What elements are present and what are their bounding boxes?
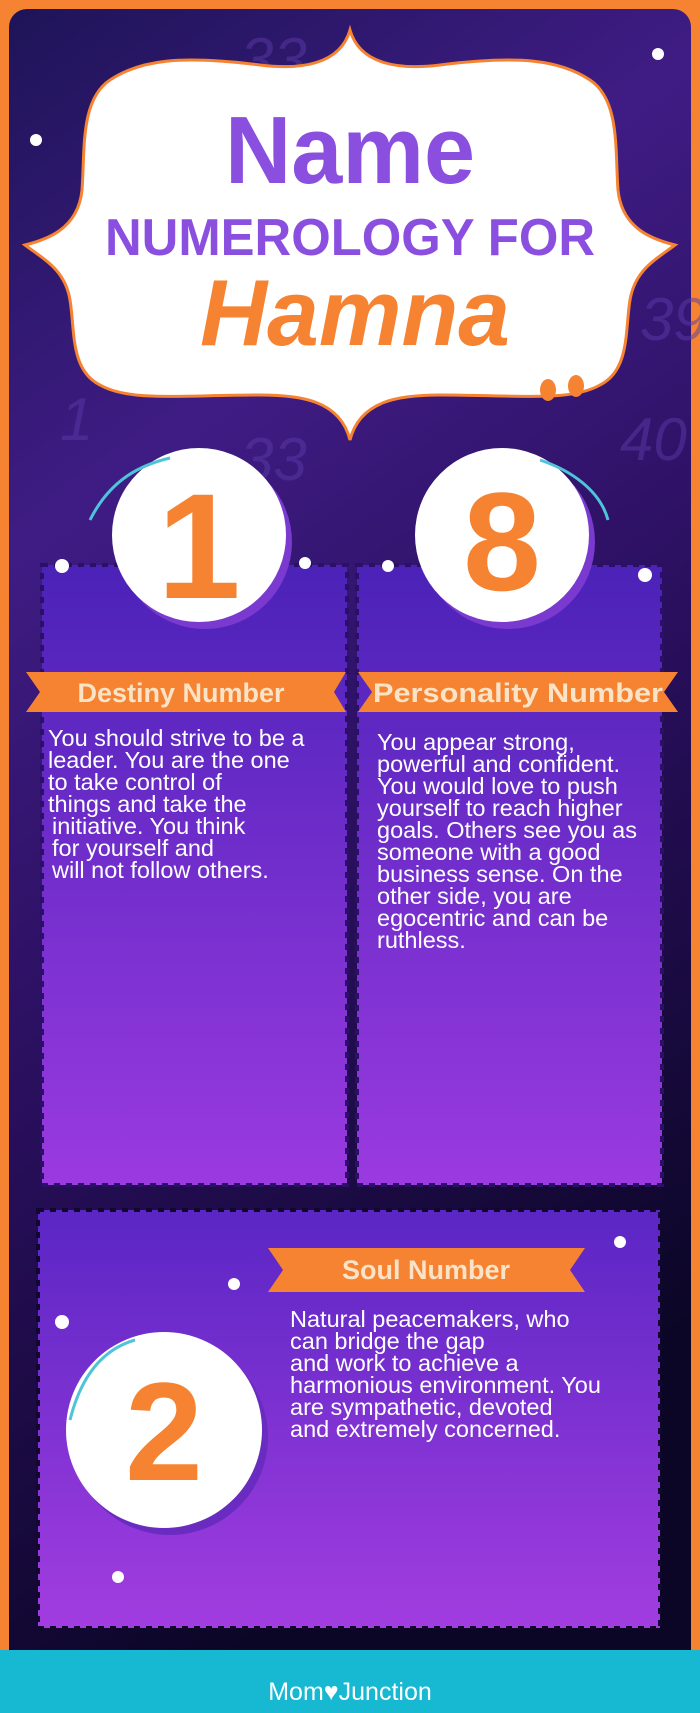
text: personality: other side, you are [377, 883, 572, 909]
circle: 8 [415, 448, 608, 629]
decorative numbers [60, 26, 700, 493]
circle: 2: 2 [125, 1353, 203, 1510]
text: personality: goals. Others see you as [377, 817, 637, 843]
heading: Name: Name [225, 97, 475, 204]
footer [0, 1650, 700, 1713]
decorative numbers: 40 [620, 406, 687, 473]
text: destiny: for yourself and [52, 835, 214, 861]
ribbon: Destiny Number: Destiny Number [77, 678, 285, 708]
text: personality: powerful and confident. [377, 751, 620, 777]
text: soul [290, 1306, 601, 1442]
ribbon: Personality Number: Personality Number [373, 678, 664, 708]
text: destiny: You should strive to be a [48, 725, 305, 751]
text: soul: and work to achieve a [290, 1350, 520, 1376]
panel: personality [357, 565, 662, 1185]
ribbon: Soul Number: Soul Number [342, 1255, 510, 1285]
heading: Hamna: Hamna [200, 260, 510, 365]
text: personality: business sense. On the [377, 861, 623, 887]
ribbon: Destiny Number [26, 672, 346, 712]
heading: NUMEROLOGY FOR: NUMEROLOGY FOR [105, 209, 595, 267]
circle: 2 [66, 1332, 268, 1535]
text: personality: You would love to push [377, 773, 618, 799]
decorative numbers: 33 [240, 26, 307, 93]
decorative numbers: 33 [240, 426, 307, 493]
panel: soul [38, 1210, 660, 1628]
panel: destiny [42, 565, 347, 1185]
text: personality: yourself to reach higher [377, 795, 623, 821]
text: destiny: initiative. You think [52, 813, 246, 839]
text: destiny: to take control of [48, 769, 222, 795]
text: destiny [48, 725, 305, 883]
text: soul: harmonious environment. You [290, 1372, 601, 1398]
text: destiny: leader. You are the one [48, 747, 290, 773]
footer: Mom♥Junction [268, 1678, 432, 1706]
text: soul: are sympathetic, devoted [290, 1394, 553, 1420]
ribbon: Personality Number [358, 672, 678, 712]
text: personality: someone with a good [377, 839, 600, 865]
text: soul: and extremely concerned. [290, 1416, 560, 1442]
title cartouche [25, 30, 675, 440]
text: personality [377, 729, 637, 953]
circle: 1: 1 [157, 462, 241, 630]
text: destiny: things and take the [48, 791, 247, 817]
text: soul: can bridge the gap [290, 1328, 485, 1354]
circle: 8: 8 [463, 463, 541, 620]
circle: 1 [90, 448, 292, 630]
icon: feet [540, 375, 584, 401]
text: destiny: will not follow others. [51, 857, 269, 883]
text: personality: You appear strong, [377, 729, 575, 755]
ribbon: Soul Number [268, 1248, 585, 1292]
decorative numbers: 1 [60, 386, 93, 453]
text: personality: ruthless. [377, 927, 466, 953]
text: soul: Natural peacemakers, who [290, 1306, 570, 1332]
text: personality: egocentric and can be [377, 905, 608, 931]
